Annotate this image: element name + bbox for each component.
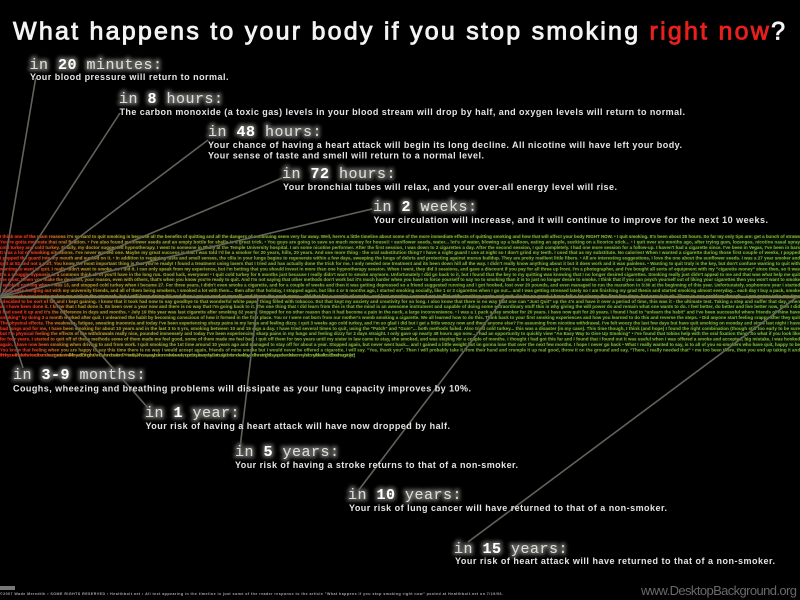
title: What happens to your body if you stop smoking right now?	[13, 18, 785, 46]
milestone: 15 years: Your risk of heart attack will have returned to that of a non-smoker.	[455, 556, 775, 566]
icon: licence badge	[0, 586, 15, 590]
milestone: 3-9 months: Coughs, wheezing and breathing problems will dissipate as your lung capacity improves by 10%.	[13, 384, 471, 394]
timeline band of reader comments: You're gotta motivate that oral fixation. • I've also found sunflower seeds and an empty bottle for shells is a great trick. • You guys are going to save so much money for house!! • sunflower seeds, water... lot's of water, blowing up a balloon, eating an apple, sucking on a licorice stick... • I quit over six months ago, after trying gum, lozenges, nicotine nasal spray	[0, 239, 800, 244]
timeline band of reader comments: I smoked nothing when I was 13, and stopped cold turkey when I became 27. For three years, I didn't even smoke a cigarette, and for a couple of weeks and then it was getting depressed so a friend suggested running and I got hooked, lost over 20 pounds, and even managed to run the marathon in 3:30 at the beginning of this year. Unfortunately, sophomore year I started	[0, 283, 800, 288]
timeline band of reader comments: It was a lot of smoking situations. I've never wanted one. Maybe my great success is that I was told I'd be a smoker for 20 years, hills, 20 years. And one more thing - the oral substitution thing? I have a night guard I use at night so I don't grind my teeth. I used that as my substitute. No calories! When I wanted a cigarette during those first couple of weeks, I popped	[0, 250, 800, 255]
timeline band of reader comments: then get the real nasty makes me sick in the stomach, but I still keep doing it!! and then I get so mad at myself, and throw the pack away... did that for a couple of weeks, and last monday, I vowed not to flirt with smoking again and quit. So far so good, I have felt a lot sleepy the first few days, but now it is ok. There is one problem though... I get gonna take my time	[0, 293, 800, 298]
milestone: 48 hours: in 48 hours:	[208, 124, 322, 141]
milestone: 2 weeks: in 2 weeks:	[373, 199, 478, 216]
milestone: 8 hours: in 8 hours:	[119, 91, 224, 108]
milestone: 3-9 months	[13, 367, 471, 394]
milestone: 72 hours: Your bronchial tubes will relax, and your over-all energy level will rise.	[283, 182, 617, 192]
milestone: 10 years: Your risk of lung cancer will have returned to that of a non-smoker.	[349, 503, 667, 513]
milestone: 10 years: in 10 years:	[348, 487, 462, 504]
timeline band of reader comments: It's a struggle hypnosis is a common think all of you'll have in the long run. Good luck, everyone! • I quit cold turkey for 6 months just because I really didn't want to smoke anymore. Unfortunately I did go back to it, but I found that the key to my quitting was knowing that I no longer desired cigarettes. Smoking really just didn't appeal to me and that was what help me quit	[0, 272, 800, 277]
timeline band of reader comments: smoking" by doing 3 a month worked after quit. I unlearned the habit by becoming conscious of how it formed in the first place. You or I were not born from our mother's womb smoking a cigarette. We all learned how to do this. Think back to your first smoking experiences and how you learned to do this and reverse the steps. • Did anyone start feeling crappy after they quit	[0, 315, 800, 320]
milestone: 48 hours: Your chance of having a heart attack will begin its long decline. All nicotine will have left your body.	[208, 140, 682, 150]
milestone: 5 years: in 5 years:	[235, 444, 340, 461]
timeline band of reader comments: for four years. I started to quit off of these methods some of them made me feel good, some of them made me feel bad. I quit off them for two years until my sister in law came to stay, she smoked, and was staying for a couple of months. I thought I had got this far and I found that I found out it was useful when I was offered a smoke and accepted, big mistake, I was hooked	[0, 337, 800, 342]
milestone: 1 year: Your risk of having a heart attack will have now dropped by half.	[146, 421, 450, 431]
milestone: 48 hours: Your sense of taste and smell will return to a normal level.	[208, 150, 484, 160]
timeline band of reader comments: as I have been done it. I know that I had done it. Its been over a year now and there is no way that I'm going back to it. The one thing that I did learn from this is that the mind is an awesome instrument and capable of doing some extraordinary stuff this is why giving the will power do and remain what one wants to do. I feel better, do better and live better now, then I did	[0, 304, 800, 309]
timeline band of reader comments: I think you will make this. • I need to smoke a cigarette or I will kill myself. Bring that? and when does it end? • Here it is, 24 hours, easy, but I can make it a week, no prob. I quit every day! Seriously, I don't smoke all day, and then at night I buy a pack and relax on my balcony. I felt as if I could breathe again. [etc]	[0, 352, 356, 357]
milestone: 20 minutes	[30, 57, 228, 82]
milestone: 5 years	[235, 444, 518, 470]
milestone: 72 hours: in 72 hours:	[282, 166, 396, 183]
milestone: 20 minutes: in 20 minutes:	[30, 57, 163, 74]
watermark: www.DesktopBackground.org	[640, 583, 797, 598]
milestone: 15 years: in 15 years:	[454, 541, 568, 558]
milestone: 1 year: in 1 year:	[145, 405, 240, 422]
milestone: 5 years: Your risk of having a stroke returns to that of a non-smoker.	[235, 460, 518, 470]
connector lines from the timeline to each milestone	[0, 78, 800, 542]
milestone: 20 minutes: Your blood pressure will return to normal.	[30, 72, 228, 82]
milestone: 2 weeks: Your circulation will increase, and it will continue to improve for the next 10 weeks.	[374, 215, 768, 225]
milestone: 10 years	[348, 487, 667, 513]
timeline band of reader comments: You know that feeling when you are happy to say this time there is no way I would accept again, friends of mine smoke but I would never be offered a cigarette, I will say. "Yes, thank you". Then I will probably take it from their hand and crumple it up real good, throw it on the ground and say, "There, I really needed that" • me too been there, then you end up taking it and	[0, 347, 800, 352]
timeline band of reader comments	[0, 234, 800, 357]
milestone: 72 hours	[282, 166, 617, 192]
milestone: 8 hours	[119, 91, 685, 117]
timeline band of reader comments: I think one of the main reasons it's so hard to quit smoking is because all the benefits of quitting and all the dangers of continuing seem very far away. Well, here's a little timeline about some of the more immediate effects of quitting smoking and how that will affect your body RIGHT NOW. • I quit smoking. It's been about 20 hours. So far my only tips are: get a bunch of straws	[0, 234, 800, 239]
milestone: 15 years	[454, 541, 775, 566]
timeline band of reader comments: wanting to want to quit. I really didn't want to smoke, so I did it. I can only speak from my experience, but I'm betting that you should invest in more than one hypnotherapy session. When I went, they did 3 sessions, and gave a discount if you pay for all three up front. I'm a photographer, and I've bought all sorts of equipment with my "cigarette money" since then, so it was	[0, 266, 800, 271]
timeline band of reader comments: the most. When you make the decision, your reason, even with others, that's when you know you're ready to quit. And I'm not saying that other methods don't work but it's much harder when you have to force yourself to say no to smoking than it is to just no longer desire to smoke. I think that if you can psych yourself out of liking your cigarettes then you won't want to smoke	[0, 277, 800, 282]
milestone: 48 hours	[208, 124, 682, 160]
timeline band of reader comments: bad lungs and for me, I have been smoking for about 10 years and in the last 3 to 5 yrs, smoking between 10 and 15 cigs a day. I have tried several times to quit, using the "Patch" and "Gum"... both methods failed. Also tried cold turkey... this was a disaster (in my case). This time though, I think (and hope) I found the right combination (though still too early to be sure	[0, 326, 800, 331]
timeline band of reader comments: again. I have now been smoking when driving to and from work. I quit smoking the 1st time around 10 years ago and managed to stay off for about a year. Stopped again, but never went back... and I gained a little weight but im gonna lose that over the next few months. I hope I never go back • What I really wanted to say, is to all of you ex-smokers who have quit, happy to be	[0, 342, 800, 347]
timeline band of reader comments: quit at 52 and not a puff. You know the most important thing is that you're ready! I found a treatment using lasers that I tried and has actually done the trick for me. I only needed one treatment and its been down hill all the way. I didn't really know anything about it but it does work and it was painless. • Wanting to quit truly is the key, but don't confuse wanting to quit with	[0, 261, 800, 266]
timeline band of reader comments: I had used it up and it's the difference in days and months. • July 19 this year was last cigarette after smoking 32 years. Stopped for no other reason than it had become a pain in the neck, a large inconvenience. • I was a 1 pack a day smoker for 20 years. I have now quit for 20 years. I found I had to "unlearn the habit" and I've been successful where friends of mine have	[0, 310, 800, 315]
timeline band of reader comments: cold turkey and cold turkey. Finally, my doctor suggested hypnotherapy. I went to someone in Philly at the Temple University hospital. I am some nicotine performer. After the first session, I was down to 2 cigarettes a day. After the second session, I quit completely. I had one more session for a follow-up. I haven't had a cigarette since. I've been in Vegas, I've been in bars	[0, 245, 800, 250]
timeline band of reader comments: I have been hanging out with my university friends, and all of them being smokers, I smoked a lot with them... then after that holiday, I stopped again, but like 4 or 5 months ago, I started smoking socially, like 1 or 2 cigarettes when I go out... and I was getting stressed lately so I am finishing my grad thesis and started smoking almost everyday... each day I buy a pack, smoke	[0, 288, 800, 293]
milestone: 3-9 months: in 3-9 months:	[13, 367, 146, 384]
milestone: 2 weeks	[373, 199, 768, 225]
milestone: 1 year	[145, 405, 450, 431]
timeline band of reader comments: but I'm physical feeling the effects of the withdrawals really nice, pounded immensely and today I've been experiencing sharp pains in my lungs and feeling dizzy for 2 days straight. I only gave up nearly 48 hours ago now... I had an opportunity to quickly view "An Easy Way to Give Up Smoking" • I've found that tobins help with the oral fixation thing. So what if you look like	[0, 331, 800, 336]
milestone: 8 hours: The carbon monoxide (a toxic gas) levels in your blood stream will drop by half, and oxygen levels will return to normal.	[120, 107, 685, 117]
timeline band of reader comments: The physical effects. The weakness, fatigue, sweating insomnia and today I've been experiencing sharp pains in my lungs and feeling dizzy. I quit 3 weeks ago cold turkey, and I'm so glad I did but I get a little woozy now and then, anyone else? I'm assuming from nicotine withdrawal. I've felt woozy the last few days but have quit smoking on monday and since last night I have	[0, 320, 800, 325]
timeline band of reader comments: I popped the guard into my mouth and sucked on it. • In addition to regaining taste and smell senses, the cilia in your lungs begins to regenerate within a few days, sweeping the lungs of debris and protecting against mucus buildup. They are pretty resilient little fibers. • All are interesting suggestions, I love the one about the sunflower seeds. I was a 27 year smoker and	[0, 256, 800, 261]
timeline band of reader comments: I decided to be sort of fat and I kept gaining. I know that it took had now to say goodbye to that wonderful white paper thing filled with tobacco. But that kept my anxiety and creativity for so long. I also know that there is no way that one can "Just Quit" up the 4's and have it over a period of time, this was it - the ultimate test. Taking a step and suffer that day, when	[0, 299, 800, 304]
footer credit: ©2007 Wade Meredith • SOME RIGHTS RESERVED • Healthbolt.net • All text appearing in the timeline is just some of the reader response to the article "What happens if you stop smoking right now" posted at Healthbolt.net on 7/19/06.	[0, 592, 503, 596]
